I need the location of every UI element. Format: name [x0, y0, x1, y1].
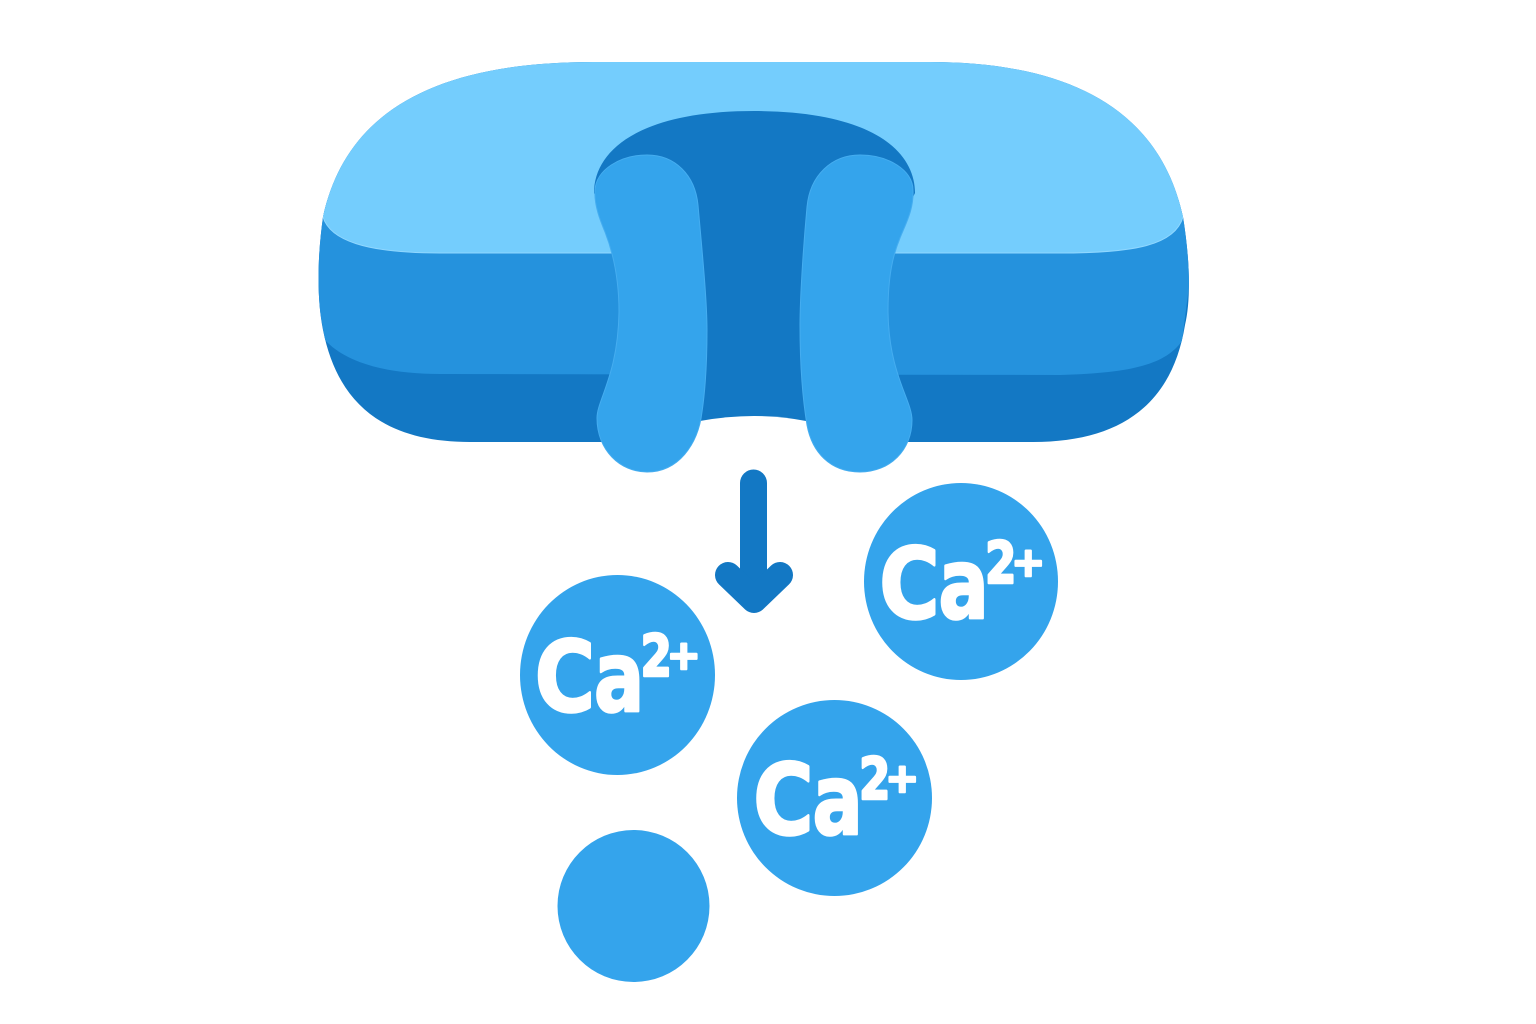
- calcium ion: left: +: [667, 633, 701, 679]
- membrane top layer: [323, 62, 1183, 254]
- calcium ion: lower middle: +: [886, 756, 919, 802]
- arrow: inward flow: [728, 483, 780, 600]
- calcium ion: lower middle: a: [812, 743, 863, 858]
- calcium ion: left: C: [535, 621, 595, 735]
- calcium ion: lower middle: C: [753, 744, 814, 858]
- calcium ion: upper right: [864, 483, 1058, 680]
- pore exit notch: [685, 416, 822, 447]
- membrane channel: [300, 40, 1210, 472]
- unlabelled ion circle: [558, 830, 710, 982]
- calcium ion: upper right: a: [938, 527, 989, 642]
- calcium ion: upper right: C: [879, 528, 940, 642]
- left channel protein: [595, 155, 707, 472]
- calcium ion: left: a: [594, 620, 644, 735]
- membrane middle layer: [300, 200, 1200, 375]
- membrane layers: [318, 62, 1189, 442]
- calcium ion: lower middle: [737, 700, 932, 896]
- calcium ion: upper right: 2: [985, 531, 1016, 597]
- calcium ion: lower middle: 2: [859, 747, 890, 813]
- calcium ion: upper right: +: [1012, 540, 1045, 586]
- calcium ion: left: [520, 575, 715, 775]
- calcium ion: left: 2: [640, 624, 672, 690]
- membrane bottom layer: [300, 50, 1210, 450]
- channel pore: [594, 111, 915, 425]
- right channel protein: [800, 155, 913, 472]
